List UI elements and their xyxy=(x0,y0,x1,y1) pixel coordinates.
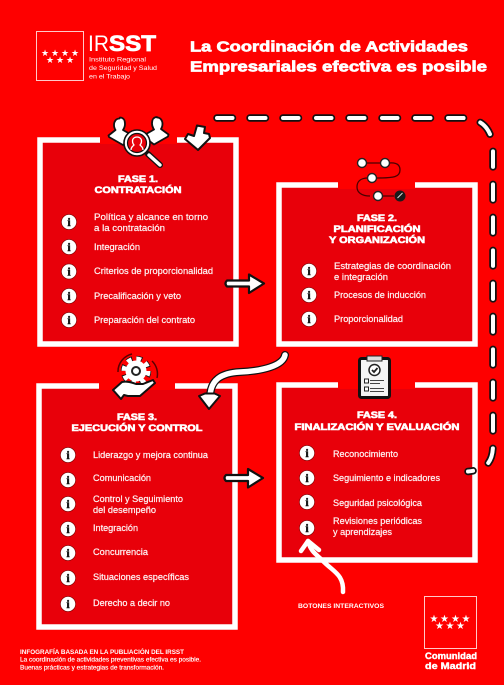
logo: IRSST: ★ xyxy=(66,55,74,65)
heading: fase 3: EJECUCIÓN Y CONTROL xyxy=(72,422,203,433)
item: procesos: Procesos de inducción xyxy=(334,290,426,300)
logo: IRSST: IR xyxy=(88,31,109,56)
item: seguimiento xyxy=(299,470,440,486)
panel: fase 2 planificación xyxy=(276,175,478,347)
item: integración: Integración xyxy=(93,523,138,533)
logo: Comunidad de Madrid: de Madrid xyxy=(425,661,476,671)
item: control y seguimiento xyxy=(60,494,183,515)
item: comunicación xyxy=(60,472,151,488)
item: situaciones específicas xyxy=(60,570,189,586)
logo: Comunidad de Madrid xyxy=(424,596,477,671)
item: liderazgo xyxy=(60,447,208,463)
item: integración xyxy=(61,239,140,255)
item: derecho a decir no: Derecho a decir no xyxy=(93,598,170,608)
panel: fase 1 contratación xyxy=(37,130,239,347)
item: liderazgo: Liderazgo y mejora continua xyxy=(93,450,208,460)
item: seguimiento: Seguimiento e indicadores xyxy=(333,473,440,483)
item: política y alcance: Política y alcance en torno xyxy=(94,212,208,222)
logo: IRSST: ★ xyxy=(71,48,79,58)
heading: fase 4: FASE 4. xyxy=(357,410,397,420)
logo: IRSST: ★ xyxy=(46,55,54,65)
panel: fase 3 ejecución xyxy=(36,376,238,630)
label: botones interactivos: BOTONES INTERACTIVOS xyxy=(298,603,385,610)
item: reconocimiento: Reconocimiento xyxy=(333,449,398,459)
footer note: Buenas prácticas y estrategias de transformación. xyxy=(20,666,164,672)
title xyxy=(190,38,487,76)
title: La Coordinación de Actividades xyxy=(190,38,468,56)
arrow: into fase 1 xyxy=(185,126,210,150)
logo: IRSST: en el Trabajo xyxy=(89,74,131,80)
item: concurrencia xyxy=(60,545,148,561)
logo: IRSST xyxy=(36,31,158,80)
logo: IRSST: SST xyxy=(109,31,157,56)
logo: IRSST: ★ xyxy=(51,48,59,58)
heading: fase 2: PLANIFICACIÓN xyxy=(334,223,420,234)
arrow: fase 1 to fase 2 xyxy=(226,274,264,293)
logo: Comunidad de Madrid: ★ xyxy=(430,614,439,625)
item: política y alcance: a la contratación xyxy=(94,223,165,233)
item: integración: Integración xyxy=(94,242,140,252)
logo: Comunidad de Madrid: ★ xyxy=(451,614,460,625)
item: comunicación: Comunicación xyxy=(93,473,151,483)
logo: IRSST: ★ xyxy=(61,48,69,58)
logo: IRSST: de Seguridad y Salud xyxy=(89,65,158,72)
icon: clipboard checklist xyxy=(360,356,390,398)
item: estrategias xyxy=(301,261,451,282)
heading: fase 1: FASE 1. xyxy=(118,174,158,184)
arrow: fase 2 to fase 3 xyxy=(199,355,285,409)
logo: Comunidad de Madrid: Comunidad xyxy=(425,651,477,661)
logo: Comunidad de Madrid: ★ xyxy=(462,614,471,625)
heading: fase 2: Y ORGANIZACIÓN xyxy=(329,234,425,245)
item: reconocimiento xyxy=(299,445,398,461)
logo: Comunidad de Madrid: ★ xyxy=(435,621,444,632)
title: Empresariales efectiva es posible xyxy=(190,58,487,76)
arrow: fase 3 to fase 4 xyxy=(224,469,263,488)
item: preparación xyxy=(61,312,195,328)
item: control y seguimiento: Control y Seguimiento xyxy=(93,494,183,504)
item: criterios xyxy=(61,264,213,279)
logo: IRSST: ★ xyxy=(41,48,49,58)
item: seguridad psicológica: Seguridad psicológica xyxy=(333,498,422,508)
item: precalificación: Precalificación y veto xyxy=(94,291,181,301)
item: estrategias: Estrategias de coordinación xyxy=(334,261,451,271)
footer note: La coordinación de actividades preventivas efectiva es posible. xyxy=(20,658,201,664)
item: preparación: Preparación del contrato xyxy=(94,315,195,325)
heading: fase 3 xyxy=(72,412,203,433)
item: proporcionalidad xyxy=(301,311,403,327)
item: derecho a decir no xyxy=(60,596,170,612)
item: control y seguimiento: del desempeño xyxy=(93,505,156,515)
heading: fase 4 xyxy=(294,410,460,432)
heading: fase 2 xyxy=(329,213,425,245)
item: criterios: Criterios de proporcionalidad xyxy=(94,266,213,276)
item: concurrencia: Concurrencia xyxy=(93,547,148,557)
logo: Comunidad de Madrid: ★ xyxy=(456,621,465,632)
item: procesos xyxy=(301,287,426,303)
item: estrategias: e integración xyxy=(334,272,388,282)
item: revisiones xyxy=(299,516,423,537)
icon: process flow xyxy=(357,158,406,202)
heading: fase 4: FINALIZACIÓN Y EVALUACIÓN xyxy=(294,421,460,432)
panel: fase 4 finalización xyxy=(276,375,478,563)
item: revisiones: y aprendizajes xyxy=(333,527,392,537)
logo: Comunidad de Madrid: ★ xyxy=(440,614,449,625)
heading: fase 1: CONTRATACIÓN xyxy=(94,184,182,195)
heading: fase 1 xyxy=(94,174,182,195)
logo: IRSST: Instituto Regional xyxy=(89,56,146,64)
arrow: pointer to interactive buttons xyxy=(301,541,343,592)
logo: Comunidad de Madrid: ★ xyxy=(446,621,455,632)
item: precalificación xyxy=(61,288,181,304)
item: integración xyxy=(60,521,138,537)
item: proporcionalidad: Proporcionalidad xyxy=(334,314,403,324)
item: seguridad psicológica xyxy=(299,494,422,510)
heading: fase 2: FASE 2. xyxy=(357,213,397,223)
item: situaciones específicas: Situaciones específicas xyxy=(93,572,189,582)
item: revisiones: Revisiones periódicas xyxy=(333,516,423,526)
footer note: INFOGRAFÍA BASADA EN LA PUBLIACIÓN DEL IRSST xyxy=(20,648,184,656)
logo: IRSST: ★ xyxy=(56,55,64,65)
footer note xyxy=(20,648,201,672)
arrow: dashed return path xyxy=(217,118,493,472)
item: política y alcance xyxy=(61,212,208,233)
heading: fase 3: FASE 3. xyxy=(117,412,157,422)
icon: gear in hand xyxy=(113,354,157,399)
icon: people search xyxy=(108,117,168,165)
